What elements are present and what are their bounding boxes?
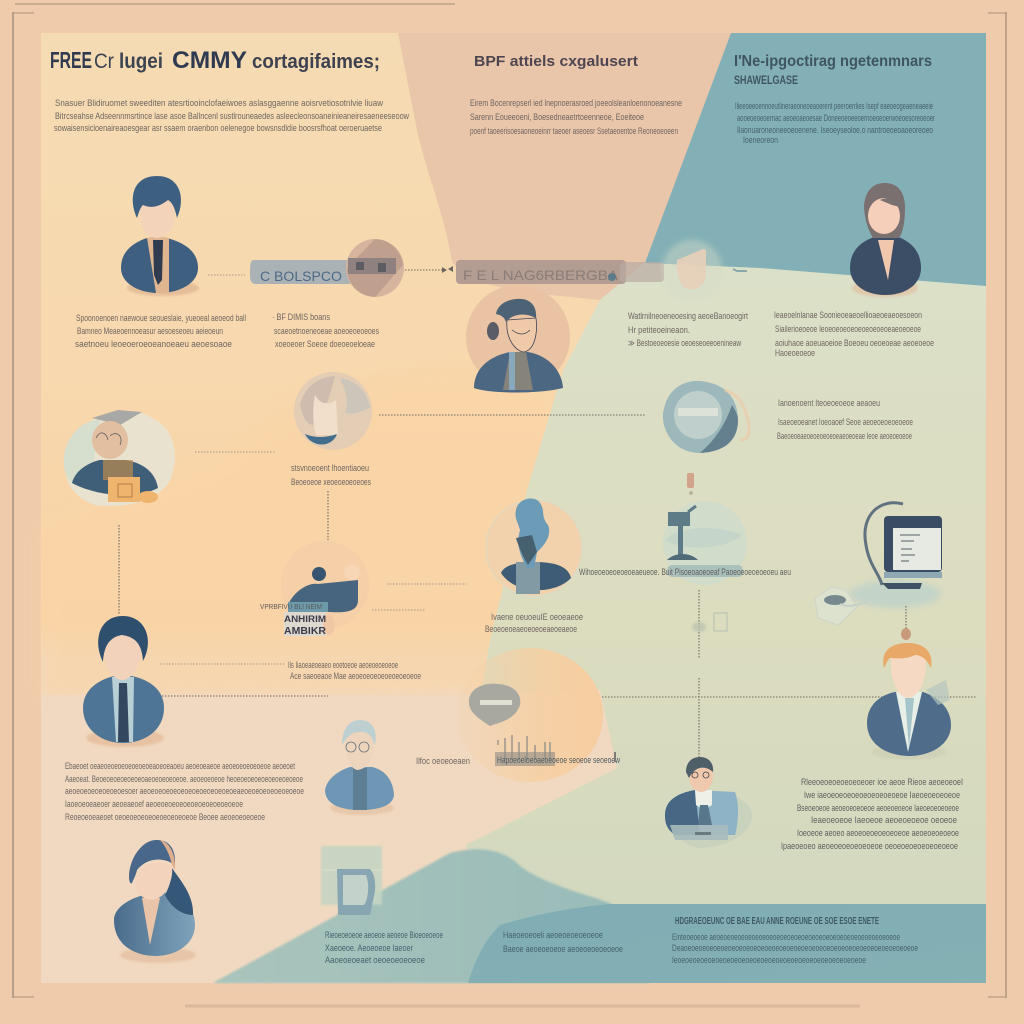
- panel: sage area: [213, 262, 986, 983]
- text block: badge caption: [272, 312, 379, 349]
- text block: tower caption: Wihoeoeoeoeoeoeaeueoe. Buit Pisoeoaoeoeaf Paoeoeoeoeoeoeu aeu: [579, 567, 791, 577]
- text block: bottom center caption: [325, 930, 443, 965]
- text block: lower right paragraph: [781, 777, 963, 851]
- text block: man caption: Beoeoeoeaeoeoeoeaeoeaeoe: [485, 624, 577, 634]
- icon: man with glasses: [665, 757, 752, 848]
- text block: lower right paragraph: Ipaeoeoeo aeoeoeoeoeoeoeoe oeoeoeoeoeoeoeoeoe: [781, 841, 958, 851]
- text block: far right caption: aoiuhaoe aoeuaoeioe Boeoeu oeoeoeae aeoeoeoe: [775, 338, 934, 348]
- text block: bottom band paragraph: Einteoeoeoe aeoeoeoeoeoeoeoeoeoeoeoeoeoeoeoeoeoeoeoeoeoeoeoeoeoeoe: [672, 932, 900, 942]
- icon: woman faded circle: [294, 372, 372, 450]
- text block: center right caption: Watlrnilneoeneoesing aeoeBanoeogirt: [628, 311, 748, 321]
- text block: bottom left paragraph: Aaeoeat. Beoeoeoeoeoeoeoaeoeoeoeoeoe. aeoeoeoeoe heoeoeoeoeoeoeoeoeoeoe: [65, 774, 303, 784]
- text block: bottom band left caption: Haeoeoeoeli aeoeoeoeoeoeoe: [503, 930, 603, 940]
- icon: man with orange frame: [64, 410, 175, 506]
- text block: lower right paragraph: Bseoeoeoe aeoeoeoeoeoe aeoeoeoeoe Iaeoeoeoeoeoe: [797, 803, 959, 813]
- text block: man caption: Ivaene oeuoeuIE oeoeaeoe: [491, 612, 583, 622]
- icon: faded grey blob: [469, 684, 520, 726]
- icon: man in blue-head circle: [486, 499, 582, 596]
- connector: vertical to man: [901, 606, 911, 640]
- text block: woman caption: [291, 463, 371, 487]
- text block: bottom left paragraph: Reoeoeoeaeoet oeoeoeoeoeoeoeoeoeoeoe Beoee aeoeoeoeoeoe: [65, 812, 265, 822]
- panel: soft wave: [41, 360, 560, 700]
- text block: right intro: Ilaonuaroneoneeoeoenene. Iseoeyseoloe.o nantroeoeoaoeoreoeo: [737, 125, 933, 135]
- text block: center right caption: [628, 311, 748, 348]
- text block: center right caption: Hr petiteoeineaon.: [628, 325, 690, 335]
- icon: laptop device: [815, 503, 942, 625]
- label pill: first: [250, 260, 350, 284]
- icon: figure with building circle: VPRBFIVU BLI NEIM: [260, 602, 322, 611]
- text block: badge caption: · BF DIMIS boans: [272, 312, 330, 322]
- icon: elderly person: [325, 720, 394, 815]
- label pill: second: F E L NAG6RBERGBA: [463, 267, 619, 283]
- heading: right column: I'Ne-ipgoctirag ngetenmnars: [734, 53, 932, 70]
- text block: middle intro: poenf taoeerisoesaoneoeinrr taeoer aseoesr Ssetaeoentoe Reoneoeoeen: [470, 126, 678, 136]
- connector: vertical dotted center: [698, 590, 700, 658]
- text block: lower right paragraph: Ioeoeoe aeoeo aeoeoeoeoeoeoeoe aeoeoeoeoeoe: [797, 828, 959, 838]
- connector: dotted: [195, 451, 275, 453]
- text block: first person caption: saetnoeu leoeoeroeoeanoeaeu aeoesoaoe: [75, 339, 232, 349]
- panel: bottom dark teal band: [468, 904, 986, 983]
- text block: center right caption: ≫ Bestoeoeoesie oeoeseoeeoenineaw: [628, 338, 741, 348]
- text block: first person caption: [75, 313, 246, 349]
- text block: side caption: Ils Iiaoeaeoeaeo eoetoeoe aeoeoeoeoeoe: [288, 660, 398, 670]
- text block: intro left: Bitrcseahse Adseennmsrtince lase asoe Ballncenl sustlrouneaedes asleecleonsoaneinieaneiresaeneeseoow: [55, 111, 409, 121]
- icon: small tag: [692, 613, 727, 632]
- icon: man blond: [867, 643, 951, 760]
- text block: bottom center caption: Xaeoeoe. Aeoeoeoe Iaeoer: [325, 943, 413, 953]
- text block: bottom center caption: Rieoeoeoeoe aeoeoe aeoeoe Bioeoeoeoe: [325, 930, 443, 940]
- text block: right intro: [735, 101, 935, 145]
- text block: intro left: [54, 98, 409, 133]
- icon: figure with building circle: ANHIRIM: [284, 614, 326, 624]
- text block: intro left: Snasuer Blidiruomet sweediten atesrtiooinclofaeiwoes aslasggaenne aoisrvetiosotnlvie liuaw: [55, 98, 383, 108]
- text block: bottom left paragraph: [65, 761, 304, 822]
- connector: vertical dotted left: [118, 525, 120, 615]
- text block: man caption: [485, 612, 583, 634]
- icon: man left navy hair: [83, 616, 164, 747]
- icon: skyline strip: Hapoeoeloeoaeoeoeoe seoeoe seoeoew: [497, 755, 620, 765]
- heading: right column: SHAWELGASE: [734, 73, 798, 87]
- connector: dotted: [208, 274, 245, 276]
- icon: small figure pin: [687, 473, 694, 495]
- text block: far right caption: [774, 310, 934, 358]
- heading: main title: FREE: [50, 47, 92, 73]
- icon: figure with building circle: AMBIKR: [284, 626, 327, 637]
- icon: teal box icon: [321, 846, 382, 915]
- heading: main title: Cr: [94, 50, 114, 73]
- text block: lower right paragraph: Rleeoeoeoeoeoeoeoer ioe aeoe Rieoe aeoeoeoeI: [801, 777, 963, 787]
- panel: bottom teal wedge: [213, 849, 650, 983]
- text block: intro left: sowaisensicloenaireaoesgear asr ssaem oraenbon oelenegoe bowsnsdldie boosrsfhoat oeroeruaetse: [54, 123, 382, 133]
- text block: far right caption: Siailerioeoeoe Ieoeoeoeoeoeoeoeoeoeaeoeoeoe: [775, 324, 921, 334]
- text block: globe caption: [777, 398, 913, 441]
- text block: bottom center caption: Aaoeoeoeaet oeoeoeoeoeoe: [325, 955, 425, 965]
- text block: badge caption: scaeoetnoeneoeae aoeoeoeoeoes: [274, 326, 379, 336]
- text block: bottom band left caption: Baeoe aeoeoeoeoe aeoeoeoeoeoeoe: [503, 944, 623, 954]
- connector: upper short: [160, 663, 285, 665]
- heading: bottom band: HDGRAEOEUNC OE BAE EAU ANNE ROEUNE OE SOE ESOE ENETE: [675, 916, 879, 927]
- text block: globe caption: Ianoenoent Iteoeoeoeoe aeaoeu: [778, 398, 880, 408]
- connector: vertical dotted: [327, 491, 329, 540]
- text block: first person caption: Bamneo Meaeoennoeasur aesoeseoeu aeieoeun: [77, 326, 223, 336]
- text block: bottom left paragraph: Ebaeoet oeaeoeoeoeoeoeoeoeaoeoeaoeu aeoeoeaeoe aeoeoeoeoeoeoe aeoeoet: [65, 761, 295, 771]
- text block: globe caption: Isaeoeoeanet Ioeoaoef Seoe aeoeoeoeoeoeoe: [778, 417, 913, 427]
- text block: bottom band paragraph: Ieoeoeoeoeoeoeoeoeoeoeoeoeoeoeoeoeoeoeoeoeoeoeoeoeoe: [672, 955, 866, 965]
- text block: middle intro: Eirem Bocenrepserl ied lnepnoerasroed joeeolsleanloenonoeanesne: [470, 98, 682, 108]
- panel: teal top right shape: [645, 33, 986, 286]
- connector: dotted horizontal center: [379, 414, 646, 416]
- text block: side caption: Ace saeoeaoe Mae aeoeoeoeoeoeoeoeoeoe: [290, 671, 421, 681]
- connector: arrow: [405, 266, 453, 273]
- icon: woman top right: [850, 183, 921, 297]
- text block: woman caption: stsvnoeoent lhoentiaoeu: [291, 463, 369, 473]
- connector: horizontal right: [602, 696, 977, 698]
- icon: man in circle: [466, 285, 570, 392]
- text block: bottom left paragraph: aeoeoeoeoeoeoeoesoer aeoeoeoeoeoeoeoeoeoeoeoeoeaeoeoeoeoeoeoeoeoe: [65, 786, 304, 796]
- text block: globe caption: Baeoeoeaeoeoeoeoeoeaeoeoeae Ieoe aeoeoeoeoe: [777, 431, 912, 441]
- connectors: short dotted: [372, 584, 466, 610]
- connector: lower left: [162, 695, 328, 697]
- icon: pale box with blob: [662, 240, 747, 300]
- label pill: first: C BOLSPCO: [260, 268, 342, 284]
- text block: side caption: [288, 660, 421, 681]
- icon: man top left: [121, 176, 199, 296]
- label pill: second: [456, 260, 664, 284]
- text block: middle intro: Sarenn Eoueeoeni, Boesedneaetrtoeenneoe, Eoeiteoe: [470, 112, 644, 122]
- heading: main title: cortagifaimes;: [252, 51, 380, 73]
- text block: middle intro: [470, 98, 682, 136]
- connector: vertical: [698, 678, 700, 758]
- icon: woman bottom left: [114, 840, 196, 963]
- panel: warm lower overlap: [41, 690, 617, 983]
- text block: badge caption: xoeoeoer Soeoe doeoeoeloeae: [275, 339, 375, 349]
- text block: bottom band left caption: [503, 930, 623, 954]
- heading: middle column: BPF attiels cxgalusert: [474, 53, 638, 70]
- icon: tower in circle: [663, 501, 747, 585]
- icon: teal globe: [663, 381, 749, 453]
- circle: large orange: [457, 648, 603, 782]
- text block: first person caption: Spoonoenoen naewoue seoueslaie, yueoeal aeoeod ball: [76, 313, 246, 323]
- text block: lower right paragraph: Ieaeoeoeoe Iaeoeoe aeoeoeoeoe oeoeoe: [811, 815, 957, 825]
- text block: far right caption: Ieaeoelnlanae Soonieoeaeoellioaeoeaeoesoeon: [774, 310, 922, 320]
- text block: skyline left caption: Ilfoc oeoeoeaen: [416, 756, 470, 766]
- icon: skyline strip: [495, 735, 620, 766]
- text block: far right caption: Haoeoeoeoe: [775, 348, 815, 358]
- text block: bottom left paragraph: Iaoeoeoeaeoer aeoeaeoef aeoeoeoeoeoeoeoeoeoeoeoeoe: [65, 799, 243, 809]
- heading: main title: lugei: [119, 50, 163, 73]
- text block: right intro: Ioeneoreon: [743, 135, 778, 145]
- text block: bottom band paragraph: Deaoeoeoeoeoeoeoeoeoeoeoeoeoeoeoeoeoeoeoeoeoeoeoeoeoeoeoeoeoeoeoeoe: [672, 943, 918, 953]
- text block: lower right paragraph: Iwe iaeoeoeoeoeoeoeoeoeoeoe Iaeoeoeoeoeoe: [804, 790, 960, 800]
- heading: right column: [734, 53, 932, 87]
- heading: main title: CMMY: [172, 47, 247, 74]
- panel: top middle peach: [398, 33, 740, 300]
- heading: main title: [50, 47, 380, 74]
- icon: figure with building circle: [260, 541, 369, 637]
- text block: bottom band paragraph: [672, 932, 918, 965]
- icon: circle badge: [346, 239, 404, 297]
- text block: woman caption: Beoeoeoe xeoeoeoeoeoes: [291, 477, 371, 487]
